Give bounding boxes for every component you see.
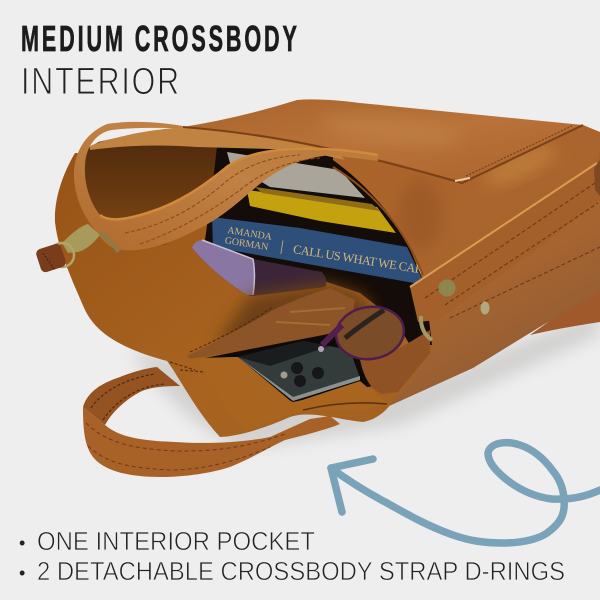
flap highlights — [319, 111, 461, 149]
feature bullet list: ONE INTERIOR POCKET — [37, 526, 315, 556]
lower strap loop — [83, 367, 340, 477]
gap behind rim — [98, 134, 132, 142]
feature bullet list — [19, 526, 565, 586]
pocket back flap — [187, 288, 355, 359]
title — [21, 19, 300, 103]
phone in pocket — [238, 341, 360, 401]
tan back rim — [90, 127, 345, 160]
feature bullet list: 2 DETACHABLE CROSSBODY STRAP D-RINGS — [37, 556, 565, 586]
title: MEDIUM CROSSBODY — [21, 19, 300, 59]
suede corner stitches — [170, 362, 205, 372]
right body panel — [300, 125, 600, 407]
bag shadow — [130, 310, 600, 450]
flap stitching — [183, 125, 583, 183]
glasses — [318, 303, 407, 363]
dark back interior wall — [80, 138, 240, 250]
top flap — [183, 99, 583, 183]
body opening edge — [333, 167, 423, 275]
purple pouch — [192, 240, 326, 296]
blue book with spine text: CALL US WHAT WE CARRY — [292, 242, 440, 279]
left d-ring hardware — [35, 224, 118, 273]
crossbody bag photo illustration — [35, 99, 600, 477]
dark cavity — [205, 138, 432, 345]
title: INTERIOR — [21, 61, 181, 103]
blue arrow — [331, 443, 600, 543]
right strap tab with rivets — [410, 150, 600, 340]
blue book with spine text — [212, 218, 422, 283]
far strap at right edge — [530, 285, 600, 335]
yellow book — [247, 187, 396, 233]
blue book with spine text: GORMAN — [224, 235, 269, 253]
body highlights — [398, 137, 561, 250]
handle with back loop — [74, 122, 378, 250]
pocket shadow — [205, 328, 378, 402]
blue book with spine text: AMANDA — [227, 225, 273, 243]
interior pocket — [170, 283, 430, 432]
feature bullet list: • — [19, 533, 25, 553]
feature bullet list: • — [19, 563, 25, 583]
right pocket leaf — [360, 330, 430, 394]
pocket front suede — [196, 357, 387, 432]
blue book with spine text: | — [279, 239, 285, 255]
interior suede — [55, 153, 432, 437]
shadowed suede above pocket — [215, 283, 385, 345]
gray book — [227, 152, 365, 198]
